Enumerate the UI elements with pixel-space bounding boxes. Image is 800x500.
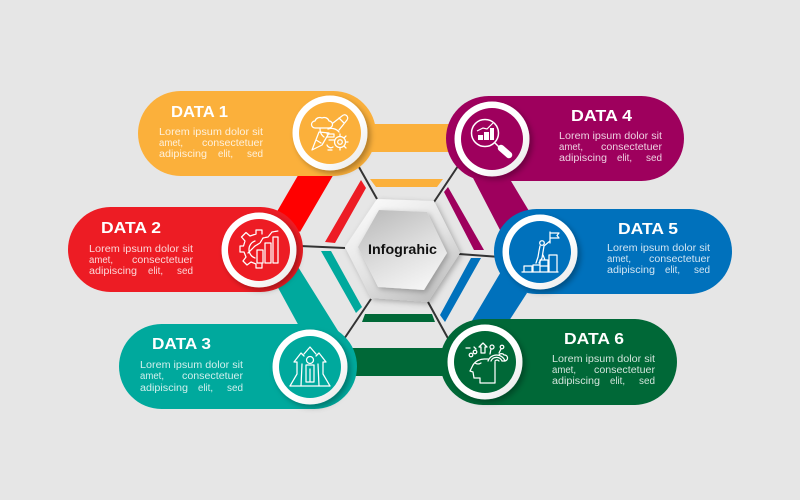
body text: elit,	[148, 266, 163, 277]
body text: adipiscing	[559, 153, 607, 164]
body text: sed	[694, 265, 710, 276]
body text: consectetuer	[202, 138, 264, 149]
title: DATA 5	[618, 221, 678, 238]
panel: data 2	[68, 207, 303, 292]
body text: elit,	[665, 265, 680, 276]
body text: sed	[639, 376, 655, 387]
body text: Lorem ipsum dolor sit	[140, 360, 243, 371]
panel: data 5	[494, 209, 732, 294]
body text: sed	[646, 153, 662, 164]
body text: Lorem ipsum dolor sit	[159, 127, 263, 138]
icon: magnifier with chart	[472, 120, 509, 155]
body text: amet,	[607, 254, 631, 265]
body text: consectetuer	[601, 142, 663, 153]
center label: Infograhic	[368, 241, 437, 257]
body text: Lorem ipsum dolor sit	[89, 244, 193, 255]
body text	[552, 354, 656, 387]
title: DATA 4	[571, 108, 632, 125]
title: DATA 2	[101, 220, 161, 237]
body text: amet,	[89, 255, 113, 266]
body text: consectetuer	[649, 254, 711, 265]
panel: data 6	[440, 319, 677, 405]
body text: amet,	[140, 371, 164, 382]
body text: elit,	[218, 149, 233, 160]
panel: data 1	[138, 91, 376, 176]
body text: elit,	[198, 383, 213, 394]
body text: sed	[177, 266, 193, 277]
body text	[559, 131, 663, 164]
body text: sed	[227, 383, 243, 394]
body text: consectetuer	[132, 255, 194, 266]
icon: climber with flag	[522, 232, 559, 272]
body text: amet,	[552, 365, 576, 376]
body text: adipiscing	[140, 383, 188, 394]
body text: adipiscing	[89, 266, 137, 277]
icon: cloud pencil gear	[312, 115, 348, 150]
body text	[607, 243, 711, 276]
panel: data 4	[446, 96, 684, 181]
icon: head with ideas	[466, 343, 508, 383]
title: DATA 1	[171, 104, 228, 121]
body text: consectetuer	[182, 371, 244, 382]
body text: consectetuer	[594, 365, 656, 376]
body text: adipiscing	[159, 149, 207, 160]
panel: data 3	[119, 324, 357, 409]
title: DATA 3	[152, 336, 211, 353]
outer connecting bands	[264, 124, 532, 376]
body text	[140, 360, 244, 394]
body text: elit,	[610, 376, 625, 387]
inner hexagon ring bars	[321, 179, 484, 322]
icon: gear with chart	[240, 230, 278, 268]
body text: adipiscing	[607, 265, 655, 276]
body text	[89, 244, 194, 277]
body text: Lorem ipsum dolor sit	[552, 354, 655, 365]
icon: arrows and person	[290, 347, 330, 386]
body text: amet,	[159, 138, 183, 149]
body text	[159, 127, 264, 160]
title: DATA 6	[564, 331, 624, 348]
body text: sed	[247, 149, 263, 160]
spoke connectors	[300, 160, 500, 342]
body text: amet,	[559, 142, 583, 153]
body text: elit,	[617, 153, 632, 164]
body text: Lorem ipsum dolor sit	[559, 131, 662, 142]
center hexagon	[345, 199, 460, 302]
body text: Lorem ipsum dolor sit	[607, 243, 710, 254]
body text: adipiscing	[552, 376, 600, 387]
